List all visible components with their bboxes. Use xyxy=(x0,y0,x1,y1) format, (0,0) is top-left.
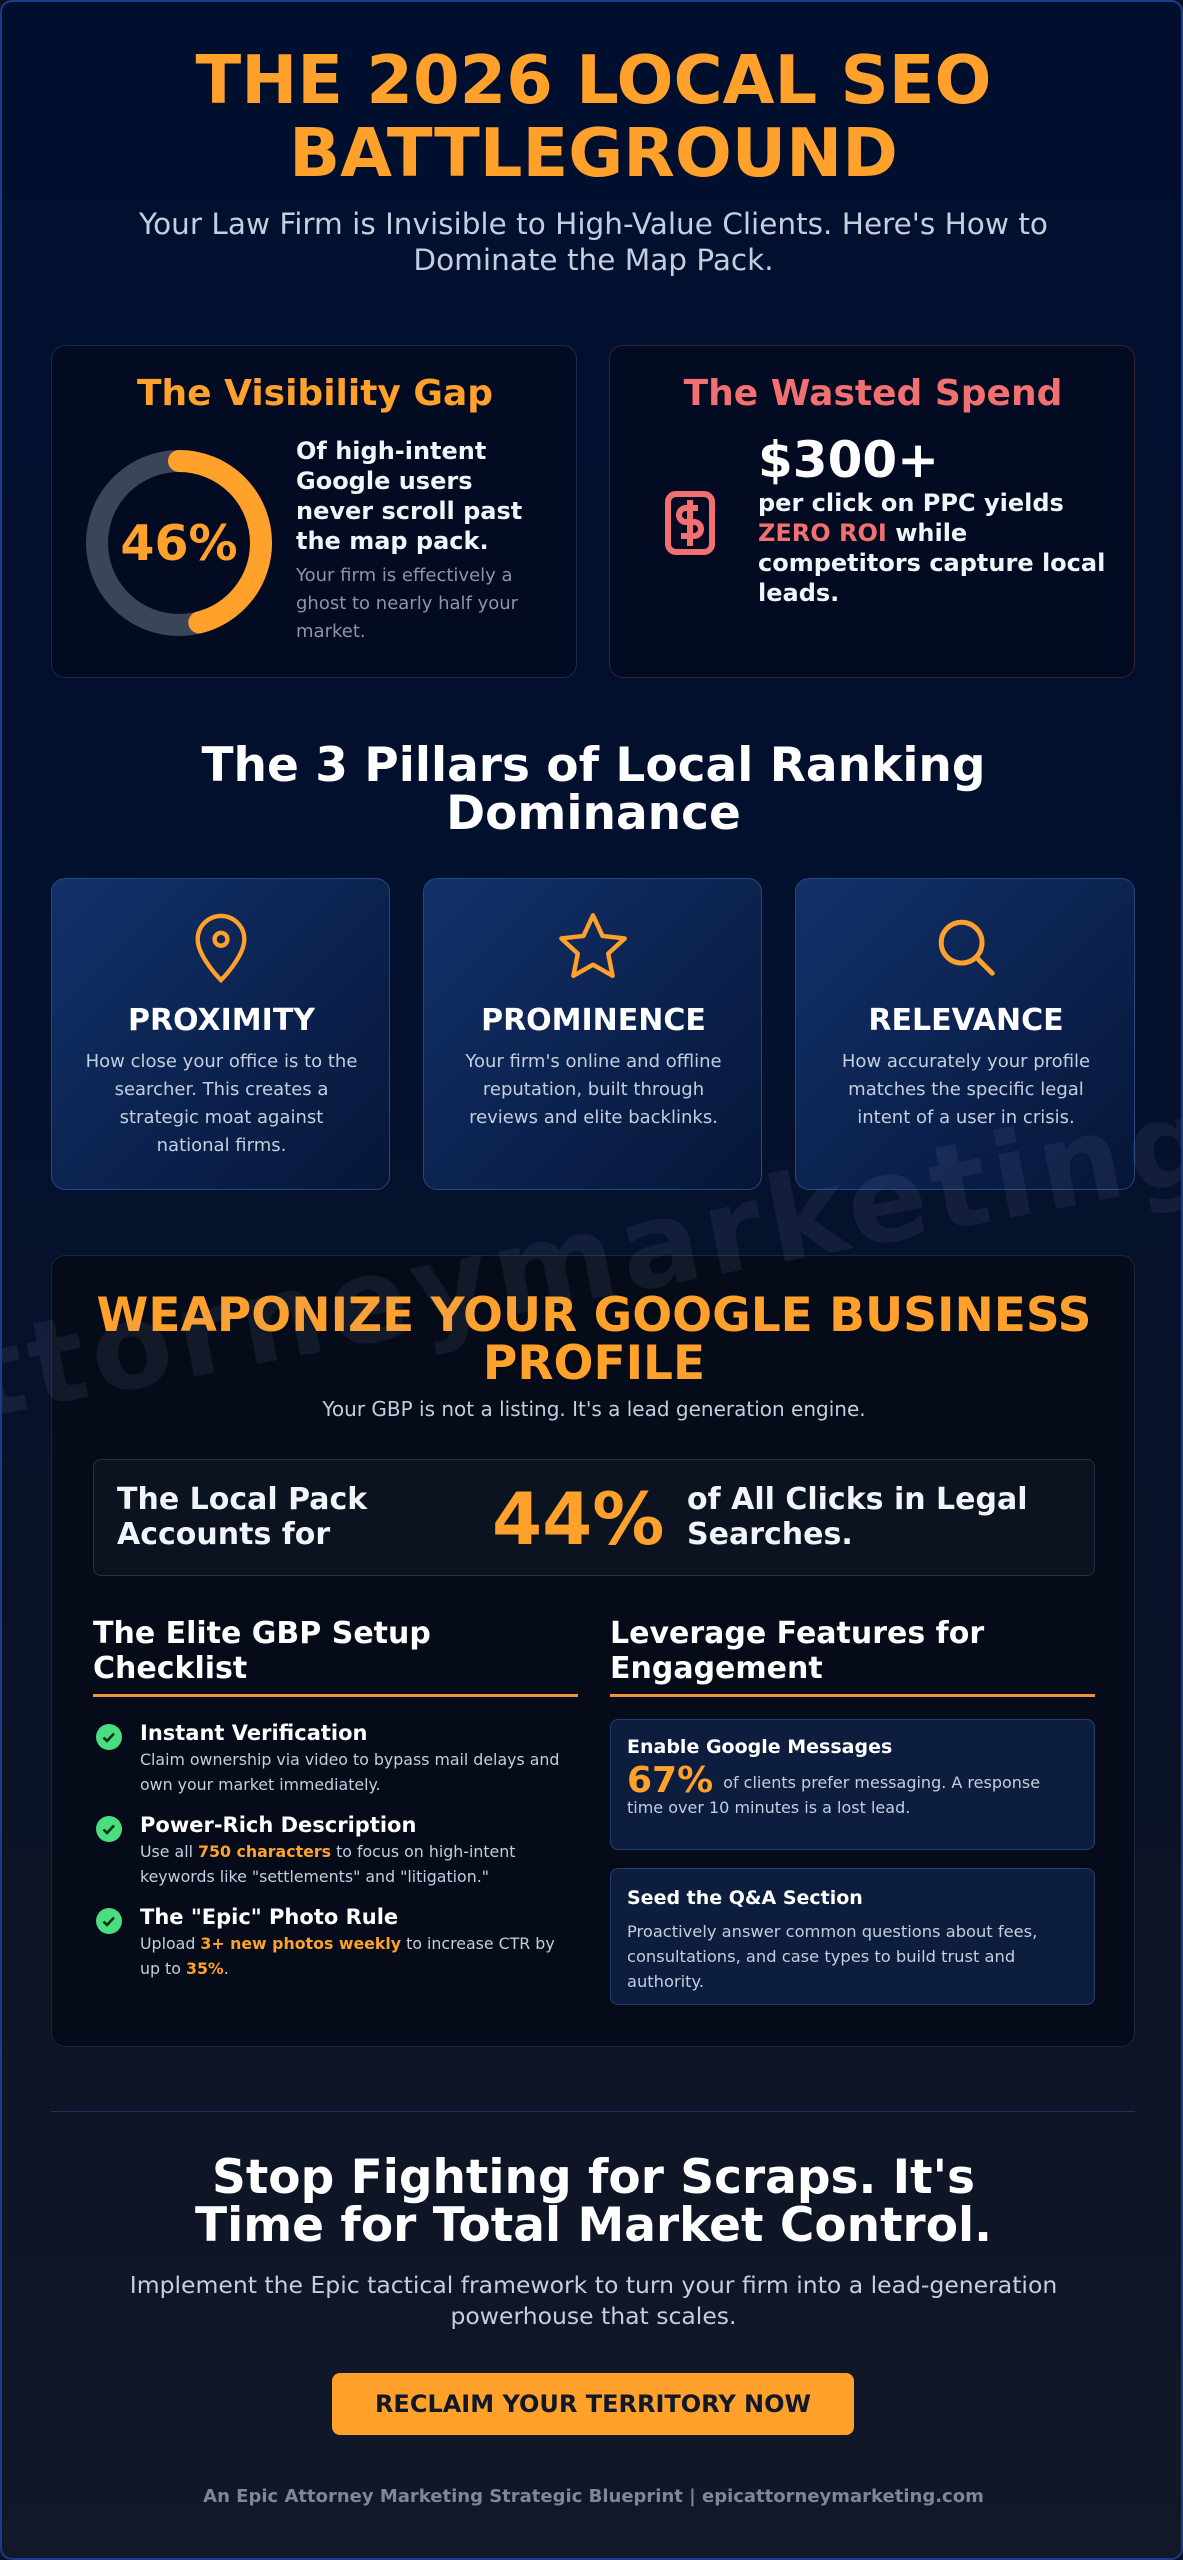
stat text xyxy=(758,431,1105,607)
label: RELEVANCE xyxy=(868,1003,1064,1038)
heading: visibility gap: The Visibility Gap xyxy=(137,373,493,414)
item: description xyxy=(96,1813,516,1886)
icon: map pin xyxy=(196,914,246,983)
item: photo rule xyxy=(96,1905,555,1978)
CTA heading: Time for Total Market Control. xyxy=(195,2198,992,2253)
stat box 44% xyxy=(93,1459,1095,1576)
icon: dollar bill xyxy=(665,491,715,555)
heading: features xyxy=(610,1616,1095,1697)
stat text xyxy=(296,437,522,642)
description: How close your office is to the searcher. This creates a strategic moat against national firms. xyxy=(86,1051,357,1156)
description: How accurately your profile matches the specific legal intent of a user in crisis. xyxy=(842,1051,1090,1128)
icon: star xyxy=(559,913,627,978)
stat box 44%: of All Clicks in Legal Searches. xyxy=(687,1482,1028,1552)
title: BATTLEGROUND xyxy=(289,114,898,192)
heading: 3 pillars: The 3 Pillars of Local Ranking xyxy=(201,738,986,793)
description: Your firm's online and offline reputation, built through reviews and elite backlinks. xyxy=(465,1051,722,1128)
panel: relevance xyxy=(795,878,1135,1190)
panel: visibility gap xyxy=(51,345,577,678)
panel: GBP xyxy=(51,1255,1135,2047)
item: instant verification: Instant Verification xyxy=(140,1721,367,1745)
heading: 3 pillars: Dominance xyxy=(446,786,741,841)
box: messages xyxy=(610,1719,1095,1850)
column: checklist xyxy=(93,1616,578,1978)
subheading: Your GBP is not a listing. It's a lead generation engine. xyxy=(322,1397,866,1421)
subtitle: Your Law Firm is Invisible to High-Value Clients. Here's How to Dominate the Map Pack. xyxy=(139,207,1048,277)
heading: wasted spend: The Wasted Spend xyxy=(684,373,1062,414)
item: photo rule: Upload 3+ new photos weekly to increase CTR by up to 35%. xyxy=(140,1934,555,1978)
heading: 3 pillars xyxy=(201,738,986,841)
panel: prominence xyxy=(423,878,762,1190)
CTA button: RECLAIM YOUR TERRITORY NOW xyxy=(375,2390,811,2418)
stat box 44%: The Local Pack Accounts for xyxy=(117,1482,367,1552)
box: Q&A: Seed the Q&A Section xyxy=(627,1887,863,1909)
title xyxy=(196,41,991,192)
label: PROMINENCE xyxy=(481,1003,706,1038)
CTA button xyxy=(332,2373,854,2435)
label: PROXIMITY xyxy=(128,1003,315,1038)
item: instant verification xyxy=(96,1721,559,1794)
icon: magnifier xyxy=(938,920,995,976)
item: description: Use all 750 characters to focus on high-intent keywords like "settlements" and "litigation." xyxy=(140,1842,515,1886)
heading: weaponize xyxy=(97,1288,1091,1391)
panel: wasted spend xyxy=(609,345,1135,678)
CTA heading xyxy=(195,2150,992,2253)
item: description: Power-Rich Description xyxy=(140,1813,416,1837)
item: photo rule: The "Epic" Photo Rule xyxy=(140,1905,398,1929)
stat text: Your firm is effectively a ghost to nearly half your market. xyxy=(296,565,518,642)
stat text: per click on PPC yields ZERO ROI while competitors capture local leads. xyxy=(758,489,1105,607)
box: messages: Enable Google Messages xyxy=(627,1736,892,1758)
heading: features: Leverage Features for Engagement xyxy=(610,1616,984,1686)
heading: checklist xyxy=(93,1616,578,1697)
donut chart 46% xyxy=(86,450,272,636)
stat text: $300+ xyxy=(758,431,939,489)
heading: weaponize: WEAPONIZE YOUR GOOGLE BUSINESS xyxy=(97,1288,1091,1343)
box: Q&A xyxy=(610,1868,1095,2005)
CTA text: Implement the Epic tactical framework to turn your firm into a lead-generation powerhouse that scales. xyxy=(130,2271,1057,2330)
donut chart 46%: 46% xyxy=(120,515,238,572)
box: messages: 67% of clients prefer messaging. A response time over 10 minutes is a lost lead. xyxy=(627,1760,1040,1817)
heading: weaponize: PROFILE xyxy=(483,1336,705,1391)
CTA heading: Stop Fighting for Scraps. It's xyxy=(212,2150,975,2205)
panel: proximity xyxy=(51,878,390,1190)
stat text: Of high-intent Google users never scroll past the map pack. xyxy=(296,437,522,555)
heading: checklist: The Elite GBP Setup Checklist xyxy=(93,1616,431,1686)
item: instant verification: Claim ownership via video to bypass mail delays and own your market immediately. xyxy=(140,1750,559,1794)
title: THE 2026 LOCAL SEO xyxy=(196,41,991,119)
stat box 44%: 44% xyxy=(492,1477,664,1561)
box: Q&A: Proactively answer common questions about fees, consultations, and case types to build trust and authority. xyxy=(627,1922,1037,1991)
column: features xyxy=(610,1616,1095,2005)
footer: An Epic Attorney Marketing Strategic Blueprint | epicattorneymarketing.com xyxy=(203,2486,984,2507)
